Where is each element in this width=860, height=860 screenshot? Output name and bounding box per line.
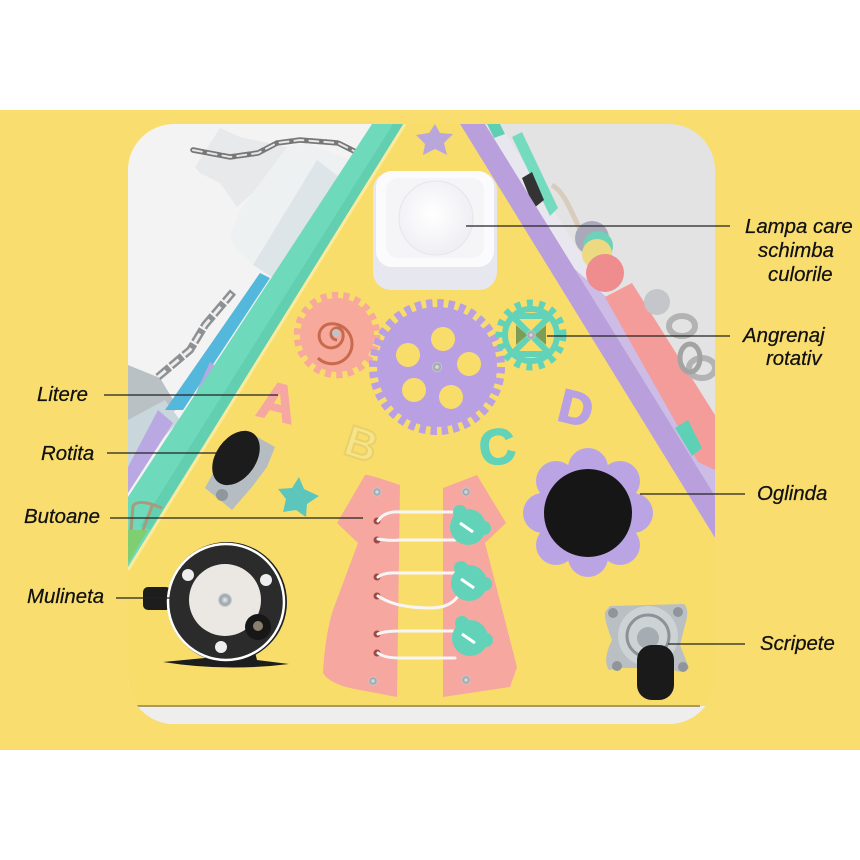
letter B: B [339, 416, 384, 473]
letter C: C [475, 417, 519, 477]
photo panel [128, 124, 715, 724]
gear: pink spiral [298, 296, 376, 374]
caster wheel: left [202, 422, 275, 510]
bear button 2 [451, 561, 492, 601]
leader line: Butoane [110, 517, 363, 519]
bear button 3 [452, 616, 493, 656]
yellow board [128, 124, 715, 706]
lower chain [158, 292, 233, 377]
leader line: Litere [104, 394, 278, 396]
bear button 1 [450, 505, 491, 545]
left side toys [128, 128, 358, 493]
caster wheel: right [605, 604, 689, 700]
lace holes [374, 518, 380, 656]
label: Angrenaj rotativ: Angrenaj [742, 325, 825, 347]
label: Lampa care schimba culorile [745, 216, 853, 286]
leader line: Lampa [466, 225, 730, 227]
flower mirror [523, 448, 653, 577]
purple side rail [460, 124, 715, 538]
label: Oglinda: Oglinda [757, 483, 827, 505]
star: teal [278, 477, 319, 517]
left dress panel [323, 475, 400, 697]
yellow background band [0, 110, 860, 750]
screws [372, 488, 382, 496]
laced dress [323, 475, 517, 697]
star: purple [416, 124, 453, 155]
label: Butoane: Butoane [24, 506, 100, 528]
green side piece [128, 530, 148, 563]
laces [378, 512, 458, 658]
upper chain [190, 137, 356, 160]
label: Litere: Litere [37, 384, 88, 406]
white box [230, 143, 350, 278]
right side toys [485, 124, 715, 496]
infographic canvas [0, 110, 860, 750]
leader line: Mulineta [116, 597, 170, 599]
letter D: D [554, 379, 598, 437]
letter A: A [253, 370, 303, 436]
pink ball [586, 254, 624, 292]
leader line: Scripete [668, 643, 745, 645]
right dress panel [443, 475, 517, 697]
label: Rotita: Rotita [41, 443, 94, 465]
white strip under board [128, 706, 715, 724]
gear: teal [499, 303, 563, 367]
leader line: Rotita [107, 452, 218, 454]
label: Angrenaj rotativ [742, 325, 825, 370]
label: Angrenaj rotativ: rotativ [766, 348, 823, 370]
lamp [373, 171, 497, 290]
teal side rail [128, 124, 405, 570]
label: Lampa care schimba culorile: Lampa care [745, 216, 853, 238]
label: Mulineta: Mulineta [27, 586, 104, 608]
metal rings [644, 289, 670, 315]
label: Lampa care schimba culorile: schimba [758, 240, 834, 262]
fishing reel [143, 542, 289, 668]
leader line: Oglinda [640, 493, 745, 495]
label: Lampa care schimba culorile: culorile [768, 264, 833, 286]
gear: large purple [374, 304, 500, 430]
white box back piece [196, 128, 286, 206]
label: Scripete: Scripete [760, 633, 835, 655]
leader line: Angrenaj [547, 335, 730, 337]
buckle [131, 502, 162, 530]
